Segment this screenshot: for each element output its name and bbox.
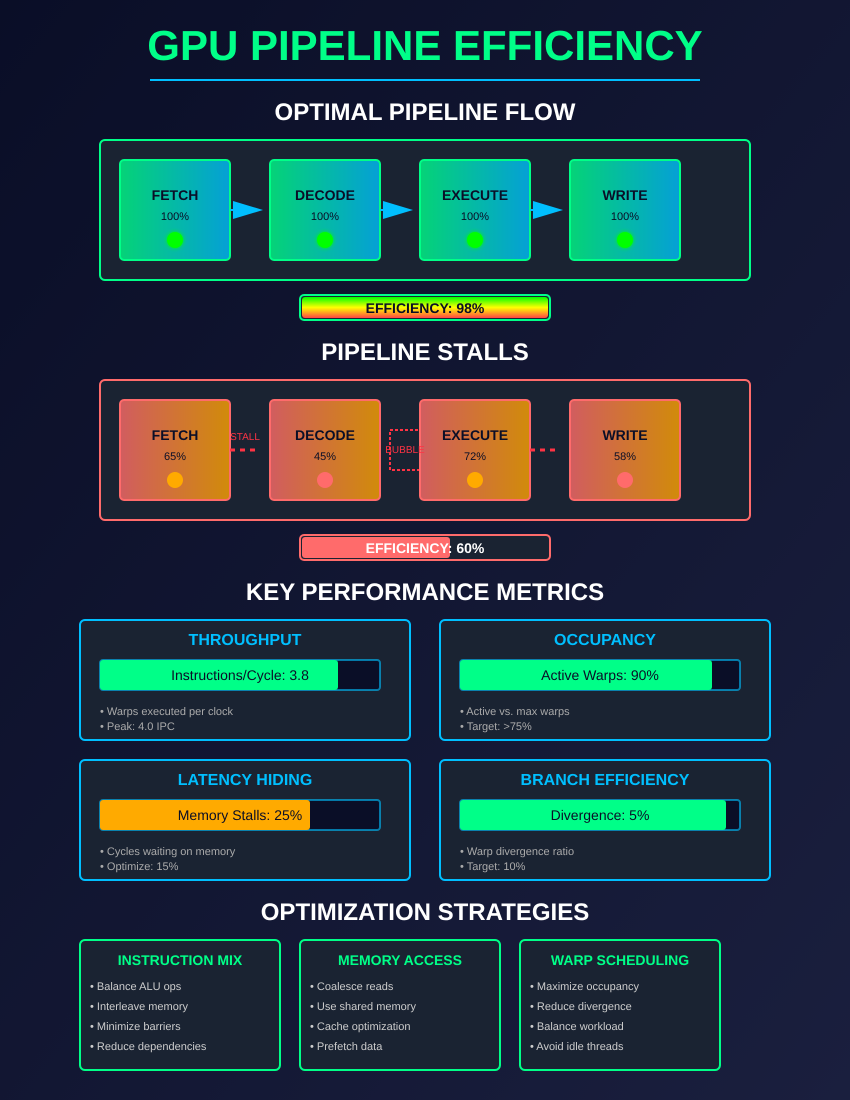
- stage: decode: 45%: [314, 451, 336, 463]
- stage: fetch: 65%: [164, 451, 186, 463]
- stage: fetch: FETCH: [152, 427, 198, 443]
- meter: divergence: Divergence: 5%: [551, 807, 649, 823]
- title: GPU PIPELINE EFFICIENCY: [147, 22, 703, 69]
- heading: optimal pipeline flow: OPTIMAL PIPELINE FLOW: [275, 99, 576, 126]
- efficiency bar: 60%: [300, 535, 550, 560]
- stage: write: [570, 160, 680, 260]
- panel: pipeline stalls: [100, 380, 750, 520]
- card: latency hiding: [80, 760, 410, 880]
- notes: [100, 846, 236, 873]
- list: [530, 981, 640, 1053]
- list: • Avoid idle threads: [530, 1041, 624, 1053]
- card: throughput: THROUGHPUT: [189, 632, 302, 649]
- stage: execute: EXECUTE: [442, 187, 508, 203]
- card: branch efficiency: [440, 760, 770, 880]
- stage: decode: DECODE: [295, 187, 355, 203]
- notes: [100, 706, 234, 733]
- list: [310, 981, 416, 1053]
- list: • Cache optimization: [310, 1021, 410, 1033]
- stage: execute: [420, 160, 530, 260]
- meter: active warps: Active Warps: 90%: [541, 667, 659, 683]
- heading: key performance metrics: KEY PERFORMANCE METRICS: [246, 579, 604, 606]
- notes: • Target: 10%: [460, 861, 526, 873]
- list: • Balance ALU ops: [90, 981, 182, 993]
- stage: write: 100%: [611, 211, 639, 223]
- bubble label: BUBBLE: [385, 445, 425, 456]
- list: • Reduce dependencies: [90, 1041, 207, 1053]
- stall connector: [230, 432, 260, 450]
- notes: [460, 706, 570, 733]
- list: • Prefetch data: [310, 1041, 383, 1053]
- heading: pipeline stalls: PIPELINE STALLS: [321, 339, 529, 366]
- meter: instructions per cycle: Instructions/Cycle: 3.8: [171, 667, 309, 683]
- card: occupancy: OCCUPANCY: [554, 632, 656, 649]
- card: memory access: MEMORY ACCESS: [338, 952, 462, 968]
- stage: fetch: FETCH: [152, 187, 198, 203]
- efficiency bar: 98%: EFFICIENCY: 98%: [366, 300, 485, 316]
- list: • Minimize barriers: [90, 1021, 181, 1033]
- meter: instructions per cycle: [100, 660, 380, 690]
- card: warp scheduling: [520, 940, 720, 1070]
- stage: execute: [420, 400, 530, 500]
- notes: • Optimize: 15%: [100, 861, 179, 873]
- card: branch efficiency: BRANCH EFFICIENCY: [521, 772, 690, 789]
- notes: • Warp divergence ratio: [460, 846, 574, 858]
- stage: write: 58%: [614, 451, 636, 463]
- arrow: execute to write: [530, 201, 563, 219]
- list: • Use shared memory: [310, 1001, 416, 1013]
- efficiency bar: 60%: EFFICIENCY: 60%: [366, 540, 485, 556]
- arrow: decode to execute: [380, 201, 413, 219]
- stage: write: WRITE: [602, 427, 648, 443]
- card: throughput: [80, 620, 410, 740]
- stage: execute: 72%: [464, 451, 486, 463]
- list: • Reduce divergence: [530, 1001, 632, 1013]
- notes: • Cycles waiting on memory: [100, 846, 236, 858]
- stage: write: [570, 400, 680, 500]
- stage: fetch: 100%: [161, 211, 189, 223]
- meter: divergence: [460, 800, 740, 830]
- stage: decode: [270, 400, 380, 500]
- card: instruction mix: INSTRUCTION MIX: [118, 952, 243, 968]
- stage: decode: DECODE: [295, 427, 355, 443]
- notes: [460, 846, 574, 873]
- list: [90, 981, 207, 1053]
- list: • Maximize occupancy: [530, 981, 640, 993]
- stage: fetch: [120, 160, 230, 260]
- arrow: fetch to decode: [230, 201, 263, 219]
- notes: • Target: >75%: [460, 721, 532, 733]
- notes: • Warps executed per clock: [100, 706, 234, 718]
- list: • Coalesce reads: [310, 981, 394, 993]
- card: occupancy: [440, 620, 770, 740]
- list: • Balance workload: [530, 1021, 624, 1033]
- meter: memory stalls: [100, 800, 380, 830]
- stage: write: WRITE: [602, 187, 648, 203]
- meter: active warps: [460, 660, 740, 690]
- card: instruction mix: [80, 940, 280, 1070]
- stage: decode: 100%: [311, 211, 339, 223]
- notes: • Active vs. max warps: [460, 706, 570, 718]
- heading: optimization strategies: OPTIMIZATION STRATEGIES: [261, 899, 589, 926]
- bubble outline: [390, 430, 430, 470]
- stage: decode: [270, 160, 380, 260]
- card: memory access: [300, 940, 500, 1070]
- stall connector: STALL: [230, 432, 260, 443]
- stage: execute: 100%: [461, 211, 489, 223]
- card: warp scheduling: WARP SCHEDULING: [551, 952, 689, 968]
- efficiency bar: 98%: [300, 295, 550, 320]
- panel: optimal pipeline flow: [100, 140, 750, 280]
- card: latency hiding: LATENCY HIDING: [178, 772, 312, 789]
- list: • Interleave memory: [90, 1001, 188, 1013]
- stall connector: [530, 448, 555, 452]
- meter: memory stalls: Memory Stalls: 25%: [178, 807, 302, 823]
- notes: • Peak: 4.0 IPC: [100, 721, 175, 733]
- stage: execute: EXECUTE: [442, 427, 508, 443]
- stage: fetch: [120, 400, 230, 500]
